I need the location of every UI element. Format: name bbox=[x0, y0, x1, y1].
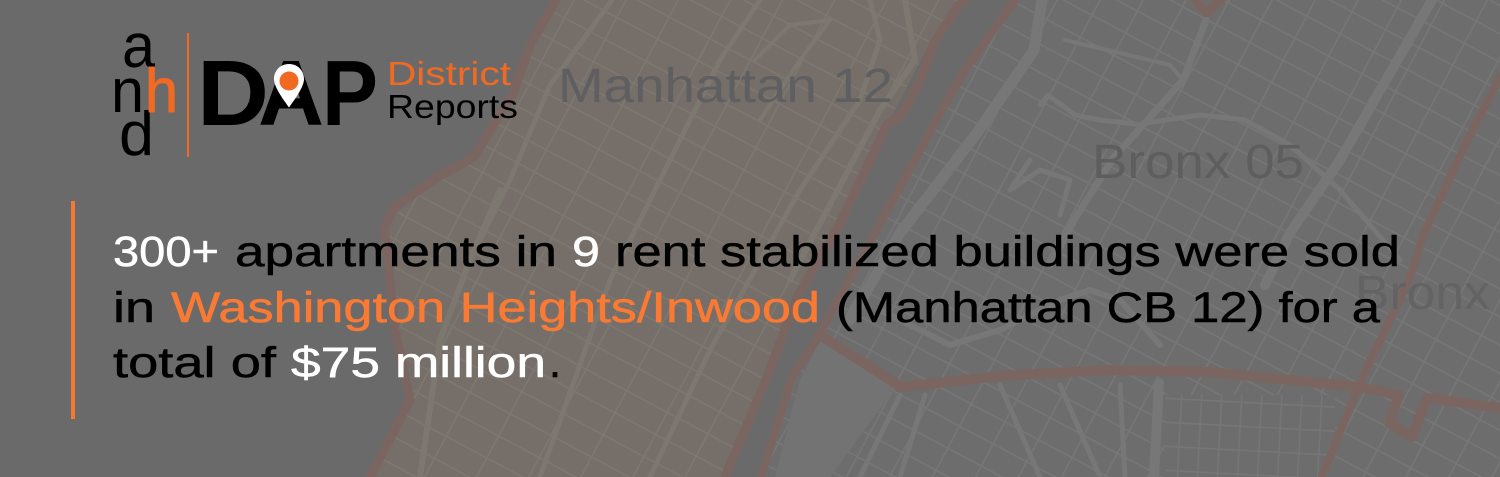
headline line 1: rent stabilized buildings were sold bbox=[615, 228, 1400, 276]
logo bbox=[111, 12, 518, 169]
headline line 2: Washington Heights/Inwood bbox=[171, 284, 820, 332]
logo: District: District bbox=[387, 55, 511, 92]
logo: Reports: Reports bbox=[387, 88, 518, 125]
map: Bronx land bbox=[761, 0, 1500, 477]
logo: DAP wordmark: P bbox=[322, 41, 378, 145]
logo: vertical divider bbox=[187, 33, 189, 157]
map label: Bronx 05: Bronx 05 bbox=[1092, 136, 1304, 189]
headline text bbox=[113, 228, 1400, 387]
logo: and mark: a bbox=[122, 12, 155, 81]
headline line 1: 9 bbox=[572, 228, 600, 276]
headline line 3: total of bbox=[113, 339, 277, 387]
headline line 1 bbox=[113, 228, 1400, 276]
headline line 3 bbox=[113, 339, 561, 387]
headline line 3: $75 million bbox=[291, 339, 546, 387]
headline line 2: (Manhattan CB 12) for a bbox=[836, 284, 1380, 332]
logo: and mark: n bbox=[111, 57, 144, 126]
map label: Manhattan 12: Manhattan 12 bbox=[558, 60, 893, 113]
headline line 2: in bbox=[113, 284, 155, 332]
map: Bronx street grid bbox=[760, 0, 1500, 477]
map: community district boundaries bbox=[370, 0, 1500, 477]
headline line 3: . bbox=[549, 339, 561, 387]
logo: DAP wordmark: A bbox=[258, 41, 324, 145]
logo: and mark bbox=[111, 12, 178, 169]
map: Manhattan street grid bbox=[370, 0, 970, 477]
logo: DAP wordmark: D bbox=[197, 41, 269, 145]
background map bbox=[366, 0, 1500, 477]
logo: DAP wordmark bbox=[197, 41, 378, 145]
logo: and mark: d bbox=[119, 100, 154, 169]
headline line 2 bbox=[113, 284, 1380, 332]
logo: and mark: h bbox=[145, 57, 178, 126]
map label: Bronx: Bronx bbox=[1355, 267, 1490, 320]
headline line 1: 300+ bbox=[113, 228, 219, 276]
icon: map pin bbox=[274, 64, 304, 108]
headline line 1: apartments in bbox=[235, 228, 557, 276]
map: Manhattan district bbox=[370, 0, 965, 477]
accent bar bbox=[71, 201, 75, 419]
